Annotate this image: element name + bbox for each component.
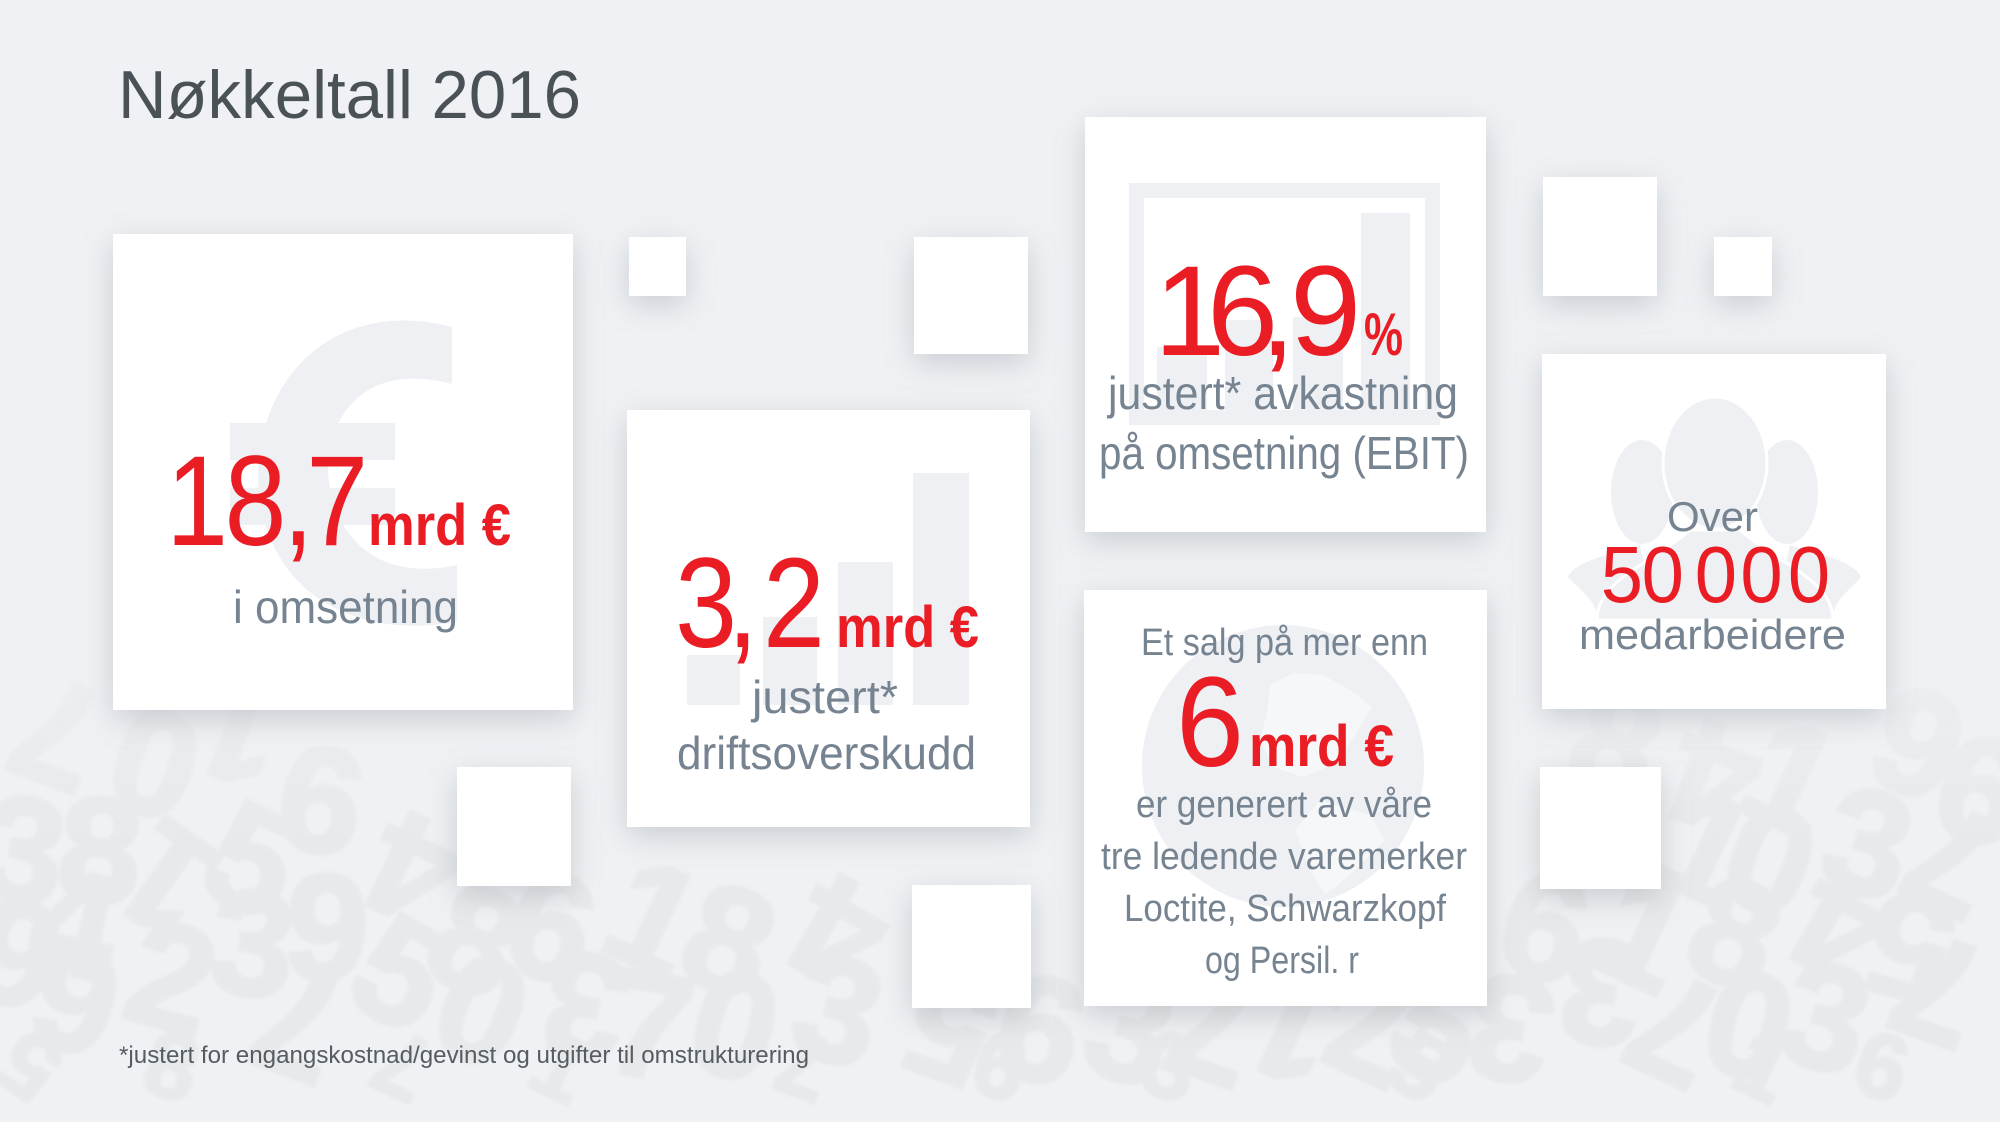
background pattern: scattered digits: 6 [978,937,1102,1121]
background pattern: scattered digits: 5 [180,766,326,954]
decorative square [1540,767,1661,889]
background pattern: scattered digits: 0 [89,670,221,856]
background pattern: scattered digits: 8 [661,847,797,1033]
icon: bar chart watermark [687,473,969,705]
background pattern: scattered digits: 2 [110,885,234,1069]
background pattern: scattered digits: 7 [230,932,366,1118]
EBIT label: på omsetning (EBIT) [1099,427,1469,479]
background pattern: scattered digits: 9 [1850,650,1986,836]
background pattern: scattered digits: 0 [673,933,797,1117]
background pattern: scattered digits: 0 [1702,767,1838,953]
background pattern: scattered digits: 5 [1362,935,1518,1122]
panel: operating profit [627,410,1030,827]
background pattern: scattered digits: 7 [1302,935,1448,1122]
background pattern: scattered digits: 0 [1687,933,1811,1117]
EBIT label: justert* avkastning [1106,367,1458,419]
background pattern: scattered digits: 8 [1548,650,1684,836]
background pattern: scattered digits: 6 [489,835,613,1019]
background pattern: scattered digits: 6 [962,1011,1038,1122]
background pattern: scattered digits: 7 [763,1008,846,1122]
background pattern: scattered digits: 3 [203,855,303,1031]
icon: framed bar chart watermark [1129,183,1440,425]
revenue label: i omsetning [233,581,458,633]
background pattern: scattered digits: 1 [172,637,308,823]
brands unit: mrd € [1249,714,1394,779]
background pattern: scattered digits: 8 [1667,840,1803,1026]
operating profit label: justert* [750,671,898,723]
background pattern: scattered digits: 8 [134,1011,210,1122]
brands text: og Persil. r [1205,940,1359,982]
brands text: er generert av våre [1136,784,1432,826]
panel: brands [1084,590,1487,1006]
background pattern: scattered digits: 1 [84,787,248,973]
employees label: medarbeidere [1579,611,1846,658]
background pattern: scattered digits: 4 [17,832,133,1014]
decorative square [457,767,571,886]
background pattern: scattered digits: 1 [581,823,727,1011]
footnote: *justert for engangskostnad/gevinst og utgifter til omstrukturering [119,1042,809,1069]
background pattern: scattered digits: 7 [594,935,706,1115]
brands text: Loctite, Schwarzkopf [1124,888,1446,930]
icon: euro watermark [230,321,457,626]
background pattern: scattered digits: 1 [1718,683,1864,871]
decorative square [912,885,1031,1008]
background pattern: scattered digits: 3 [1068,937,1192,1121]
background pattern: scattered digits: 3 [1764,925,1888,1109]
background pattern: scattered digits [0,826,2000,1104]
background pattern: scattered digits: 5 [882,936,1018,1122]
background pattern: scattered digits: 1 [1718,1010,1807,1122]
background pattern: scattered digits: 7 [358,1008,447,1122]
background pattern: scattered digits: 5 [1372,1010,1467,1122]
background pattern: scattered digits: 4 [340,776,486,964]
background pattern: scattered digits: 4 [760,839,916,1027]
background pattern: scattered digits: 5 [324,879,480,1067]
background pattern: scattered digits: 6 [1483,835,1607,1019]
background pattern: scattered digits: 0 [412,916,552,1104]
background pattern: scattered digits: 1 [1571,839,1717,1027]
background pattern: scattered digits: 7 [1602,935,1748,1122]
background pattern: scattered digits: 1 [1634,753,1780,941]
background pattern: scattered digits: 3 [529,917,641,1097]
background pattern: scattered digits: 3 [1806,751,1930,935]
employees intro: Over [1667,493,1758,540]
background pattern: scattered digits: 4 [1646,684,1782,870]
revenue figure: 18,7 [166,430,368,573]
background pattern: scattered digits: 3 [1132,1011,1208,1122]
operating profit label: driftsoverskudd [677,727,976,779]
operating profit label [677,671,976,779]
title: Nøkkeltall 2016 [118,57,581,133]
EBIT label [1099,367,1469,479]
background pattern: scattered digits: 3 [1546,903,1658,1083]
operating profit figure: 3,2 [675,532,825,675]
EBIT figure: 16,9 [1154,240,1361,383]
brands figure: 6 [1176,651,1244,794]
background pattern: scattered digits: 5 [1848,855,1972,1039]
decorative square [1714,237,1772,296]
panel: EBIT margin [1085,117,1486,532]
background pattern: scattered digits: 6 [13,908,137,1092]
decorative square [914,237,1028,354]
background pattern: scattered digits: 3 [1454,939,1566,1119]
employees figure: 50 000 [1601,529,1830,619]
decorative square [629,237,686,296]
background pattern: scattered digits: 1 [515,1010,604,1122]
background pattern: scattered digits: 9 [280,840,374,1014]
background pattern: scattered digits: 1 [1220,935,1366,1122]
background pattern: scattered digits: 6 [265,710,377,890]
background pattern: scattered digits: 4 [1762,833,1918,1021]
percent sign: % [1364,301,1403,368]
background pattern: scattered digits: 7 [1147,936,1283,1122]
brands text [1101,784,1467,982]
panel: revenue [113,234,573,710]
background pattern: scattered digits: 8 [51,763,149,937]
icon: globe watermark [1142,625,1424,907]
background pattern: scattered digits: 8 [403,846,549,1034]
background pattern: scattered digits: 6 [1844,1011,1920,1122]
decorative square [1543,177,1657,296]
panel: employees [1542,354,1886,709]
icon: people watermark [1568,397,1861,620]
brands intro: Et salg på mer enn [1141,622,1428,664]
background pattern: scattered digits: 3 [776,918,900,1102]
brands text: tre ledende varemerker [1101,836,1467,878]
revenue unit: mrd € [368,493,511,558]
operating profit unit: mrd € [836,595,979,660]
